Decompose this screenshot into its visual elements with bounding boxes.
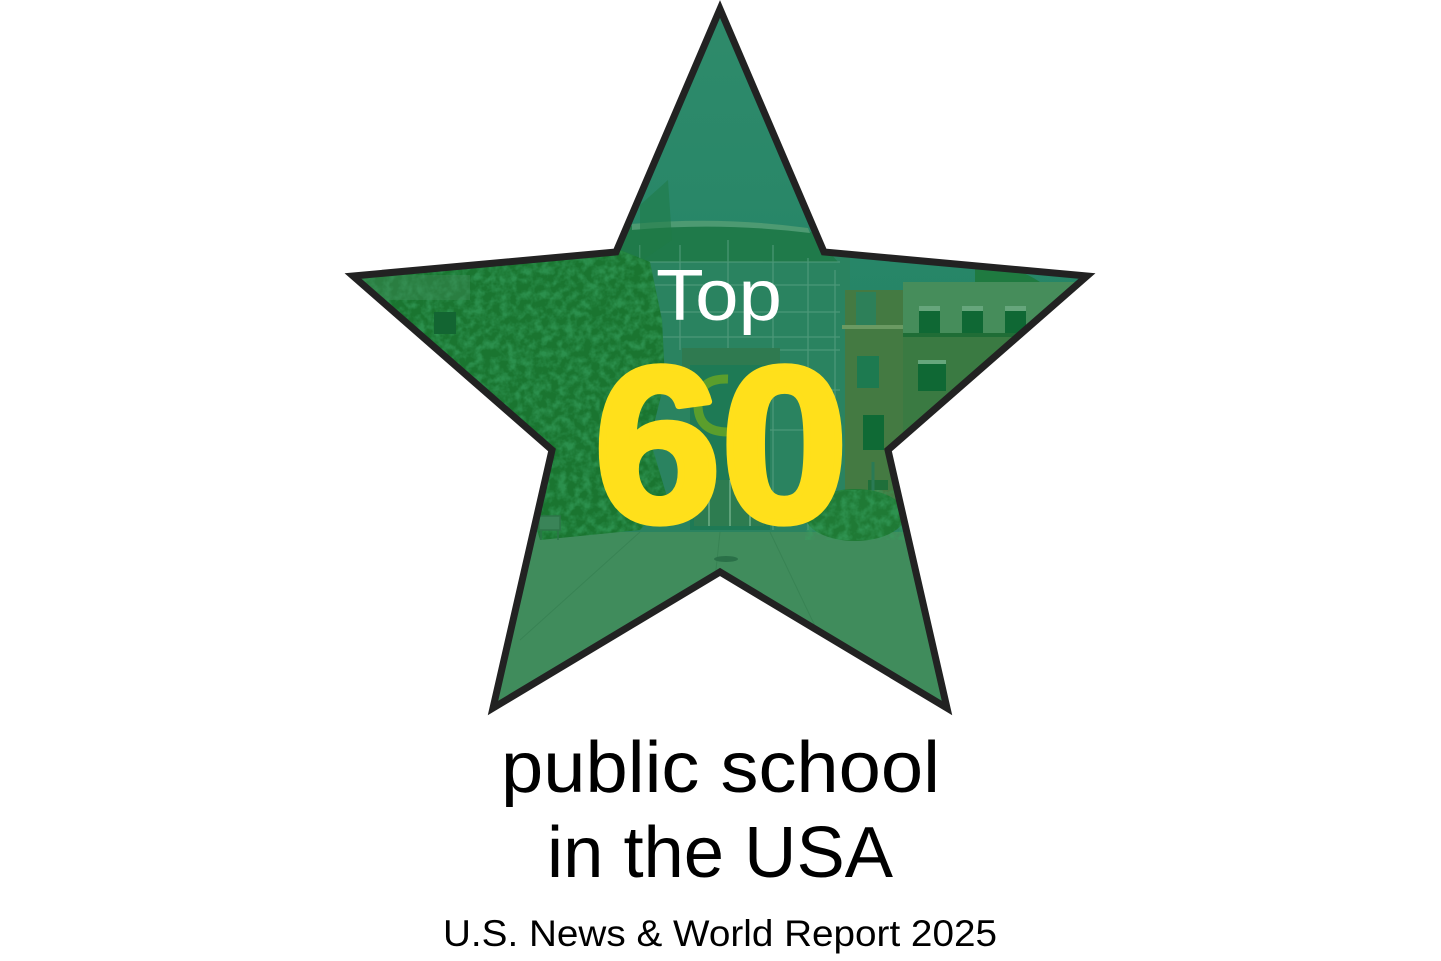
heading line 1: public school <box>501 728 940 808</box>
O logo <box>698 379 728 432</box>
brick tower <box>842 290 903 500</box>
sky <box>634 19 806 224</box>
label: Top: Top <box>656 256 782 336</box>
heading line 2: in the USA <box>547 813 893 893</box>
infographic <box>344 0 1096 954</box>
pavement <box>498 532 942 700</box>
star badge <box>340 0 1100 730</box>
star outline <box>353 9 1087 708</box>
right wing <box>903 269 1074 432</box>
entrance doors <box>694 480 764 526</box>
entrance canopy <box>682 348 780 370</box>
glass atrium <box>610 221 850 535</box>
bench <box>539 516 560 540</box>
campus photo with green tint <box>360 18 1080 701</box>
source line: U.S. News & World Report 2025 <box>443 913 997 954</box>
big number 60: 60 <box>594 321 848 568</box>
shrubs <box>805 489 905 541</box>
lamp post <box>872 462 874 491</box>
trees <box>340 180 672 540</box>
base tone <box>498 398 904 532</box>
